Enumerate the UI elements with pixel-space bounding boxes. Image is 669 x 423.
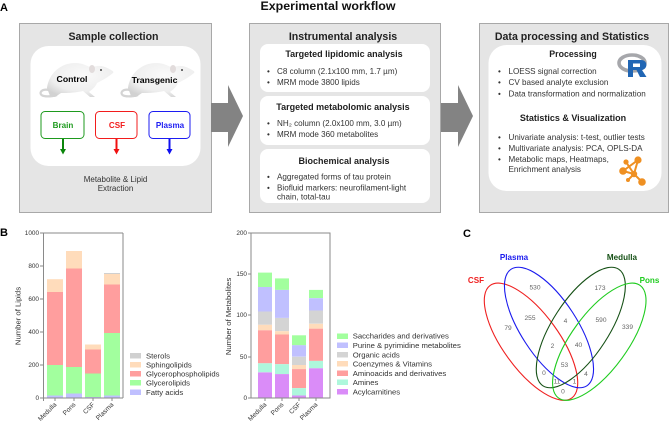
icon: control rat — [41, 63, 113, 97]
legend: metabolites: Organic acids — [353, 350, 400, 359]
text: statistics and visualization: Statistics & Visualization — [520, 113, 626, 123]
box: brain: Brain — [53, 121, 73, 130]
card: biochemical: Aggregated forms of tau protein — [277, 172, 391, 182]
text: statistics and visualization: • — [498, 144, 501, 153]
venn counts — [504, 284, 633, 396]
card: metabolomic: Targeted metabolomic analysis — [276, 102, 410, 112]
y ticks: lipids: 400 — [28, 329, 39, 336]
x labels: lipids: CSF — [82, 401, 96, 416]
icon: transgenic rat — [122, 63, 194, 97]
y ticks: lipids: 0 — [35, 395, 39, 402]
x labels: lipids: Medulla — [37, 401, 59, 423]
box: CSF: CSF — [109, 121, 125, 130]
text: extraction: Extraction — [98, 184, 133, 193]
panel label B: B — [0, 227, 8, 239]
legend: lipids: Sphingolipids — [146, 360, 192, 370]
x labels: lipids: Pons — [62, 401, 78, 417]
card: lipidomic: C8 column (2.1x100 mm, 1.7 µm) — [277, 67, 398, 76]
text: processing: • — [498, 78, 501, 87]
venn labels — [468, 253, 660, 285]
x labels: metabolites: Plasma — [299, 401, 320, 422]
y ticks: lipids: 200 — [28, 362, 39, 369]
venn counts: 590 — [595, 317, 607, 324]
text: processing: CV based analyte exclusion — [508, 78, 608, 87]
venn diagram — [467, 253, 663, 414]
white card: samples — [30, 46, 200, 166]
card: lipidomic: MRM mode 3800 lipids — [277, 78, 360, 87]
card: biochemical — [260, 149, 430, 203]
bar chart: metabolites — [224, 230, 461, 423]
icon: network — [619, 156, 646, 186]
legend: metabolites: Coenzymes & Vitamins — [353, 360, 432, 369]
y ticks: lipids: 1000 — [25, 230, 39, 237]
box: CSF — [96, 112, 137, 138]
y ticks: metabolites: 100 — [236, 312, 247, 319]
venn counts: 339 — [622, 324, 633, 331]
panel: instrumental analysis — [250, 24, 440, 212]
icon: R logo — [619, 55, 646, 77]
panel: sample collection — [20, 24, 212, 212]
card: lipidomic: Targeted lipidomic analysis — [285, 49, 403, 59]
y label: lipids: Number of Lipids — [14, 287, 22, 345]
arrow: instrumental to data — [441, 85, 473, 147]
panel label A: A — [0, 2, 8, 14]
heading: sample collection: Sample collection — [68, 31, 159, 43]
venn counts: 2 — [551, 343, 555, 350]
arrow: sample to instrumental — [211, 85, 243, 147]
icon: transgenic rat: Transgenic — [132, 75, 178, 85]
card: metabolomic — [260, 96, 430, 145]
y ticks: metabolites: 150 — [236, 271, 247, 278]
legend: lipids: Fatty acids — [146, 388, 183, 397]
card: biochemical: Biochemical analysis — [298, 156, 390, 166]
y label: metabolites: Number of Metabolites — [224, 278, 233, 355]
card: biochemical: • — [267, 172, 270, 182]
venn labels: Plasma — [500, 253, 529, 262]
text: statistics and visualization: Univariate analysis: t-test, outlier tests — [508, 133, 645, 142]
axes: lipids — [40, 233, 123, 401]
text: processing: • — [498, 67, 501, 76]
venn counts: 530 — [529, 284, 541, 292]
venn counts: 173 — [594, 285, 606, 292]
ellipse: pons — [536, 269, 663, 414]
bar chart: lipids — [14, 230, 220, 423]
text: statistics and visualization: • — [498, 155, 501, 164]
legend: metabolites: Amines — [353, 378, 378, 387]
venn counts: 4 — [584, 371, 588, 378]
card: biochemical: chain, total-tau — [277, 192, 330, 202]
axes: metabolites — [248, 233, 330, 401]
x labels: lipids: Plasma — [95, 401, 116, 422]
legend: metabolites — [337, 332, 461, 396]
text: processing: LOESS signal correction — [508, 67, 597, 76]
ellipse: CSF — [467, 269, 595, 414]
venn labels: CSF — [468, 276, 484, 285]
text: extraction: Metabolite & Lipid — [84, 175, 147, 184]
white card: processing — [488, 45, 662, 191]
text: processing: Data transformation and normalization — [508, 90, 646, 98]
x labels: lipids — [37, 401, 116, 423]
venn counts: 79 — [504, 325, 512, 332]
box: plasma — [149, 112, 190, 138]
text: processing: • — [498, 90, 501, 98]
card: metabolomic: • — [267, 119, 270, 128]
card: lipidomic: • — [267, 67, 270, 76]
text: processing: Processing — [549, 49, 597, 59]
venn counts: 0 — [542, 370, 546, 377]
legend: lipids: Glycerolipids — [146, 378, 190, 388]
arrow: plasma — [166, 139, 172, 154]
x labels: metabolites: Medulla — [247, 401, 269, 423]
x labels: metabolites — [247, 401, 320, 423]
text: statistics and visualization: Enrichment analysis — [508, 165, 581, 174]
ellipse: plasma — [488, 254, 610, 401]
y ticks: metabolites: 0 — [243, 395, 247, 402]
venn labels: Medulla — [607, 253, 638, 262]
y ticks: lipids: 800 — [28, 263, 39, 270]
venn labels: Pons — [640, 276, 660, 285]
arrow: brain — [60, 139, 66, 154]
venn counts: 11 — [554, 378, 561, 386]
legend: metabolites: Aminoacids and derivatives — [353, 369, 446, 378]
text: statistics and visualization — [498, 113, 645, 174]
card: metabolomic: NH₂ column (2.0x100 mm, 3.0 µm) — [277, 119, 402, 128]
legend: metabolites: Saccharides and derivatives — [353, 332, 449, 341]
legend: lipids — [130, 352, 220, 397]
text: statistics and visualization: Multivariate analysis: PCA, OPLS-DA — [508, 144, 643, 153]
venn counts: 1 — [573, 378, 577, 386]
legend: lipids: Sterols — [146, 352, 170, 360]
y ticks: metabolites: 50 — [240, 354, 247, 361]
icon: control rat: Control — [57, 74, 87, 84]
text: statistics and visualization: • — [498, 133, 501, 142]
card: lipidomic: • — [267, 78, 270, 87]
box: brain — [41, 112, 84, 138]
y ticks: metabolites: 200 — [236, 230, 247, 237]
box: plasma: Plasma — [156, 121, 185, 130]
venn counts: 53 — [561, 362, 568, 369]
stacked bars: lipids — [47, 251, 120, 398]
stacked bars: metabolites — [258, 273, 323, 398]
x labels: metabolites: Pons — [270, 401, 286, 417]
legend: lipids: Glycerophospholipids — [146, 370, 220, 378]
ellipse: medulla — [519, 254, 642, 401]
heading: instrumental analysis: Instrumental analysis — [289, 31, 397, 43]
y ticks: lipids: 600 — [28, 296, 39, 303]
text: statistics and visualization: Metabolic maps, Heatmaps, — [508, 155, 609, 164]
card: metabolomic: MRM mode 360 metabolites — [277, 130, 378, 139]
card: biochemical: • — [267, 184, 270, 192]
x labels: metabolites: CSF — [288, 401, 302, 416]
venn counts: 4 — [564, 318, 568, 325]
panel: data processing — [480, 24, 668, 212]
card: metabolomic: • — [267, 130, 270, 139]
card: biochemical: Biofluid markers: neurofilament-light — [277, 184, 407, 192]
card: lipidomic — [260, 44, 430, 92]
text: processing — [498, 49, 646, 98]
venn counts: 255 — [524, 315, 536, 322]
venn counts: 40 — [575, 342, 582, 349]
heading: data processing: Data processing and Statistics — [495, 31, 649, 43]
venn counts: 0 — [561, 388, 565, 396]
legend: metabolites: Acylcarnitines — [353, 387, 400, 396]
arrow: CSF — [114, 139, 120, 154]
panel label C: C — [463, 228, 471, 240]
legend: metabolites: Purine & pyrimidine metabolites — [353, 341, 461, 350]
